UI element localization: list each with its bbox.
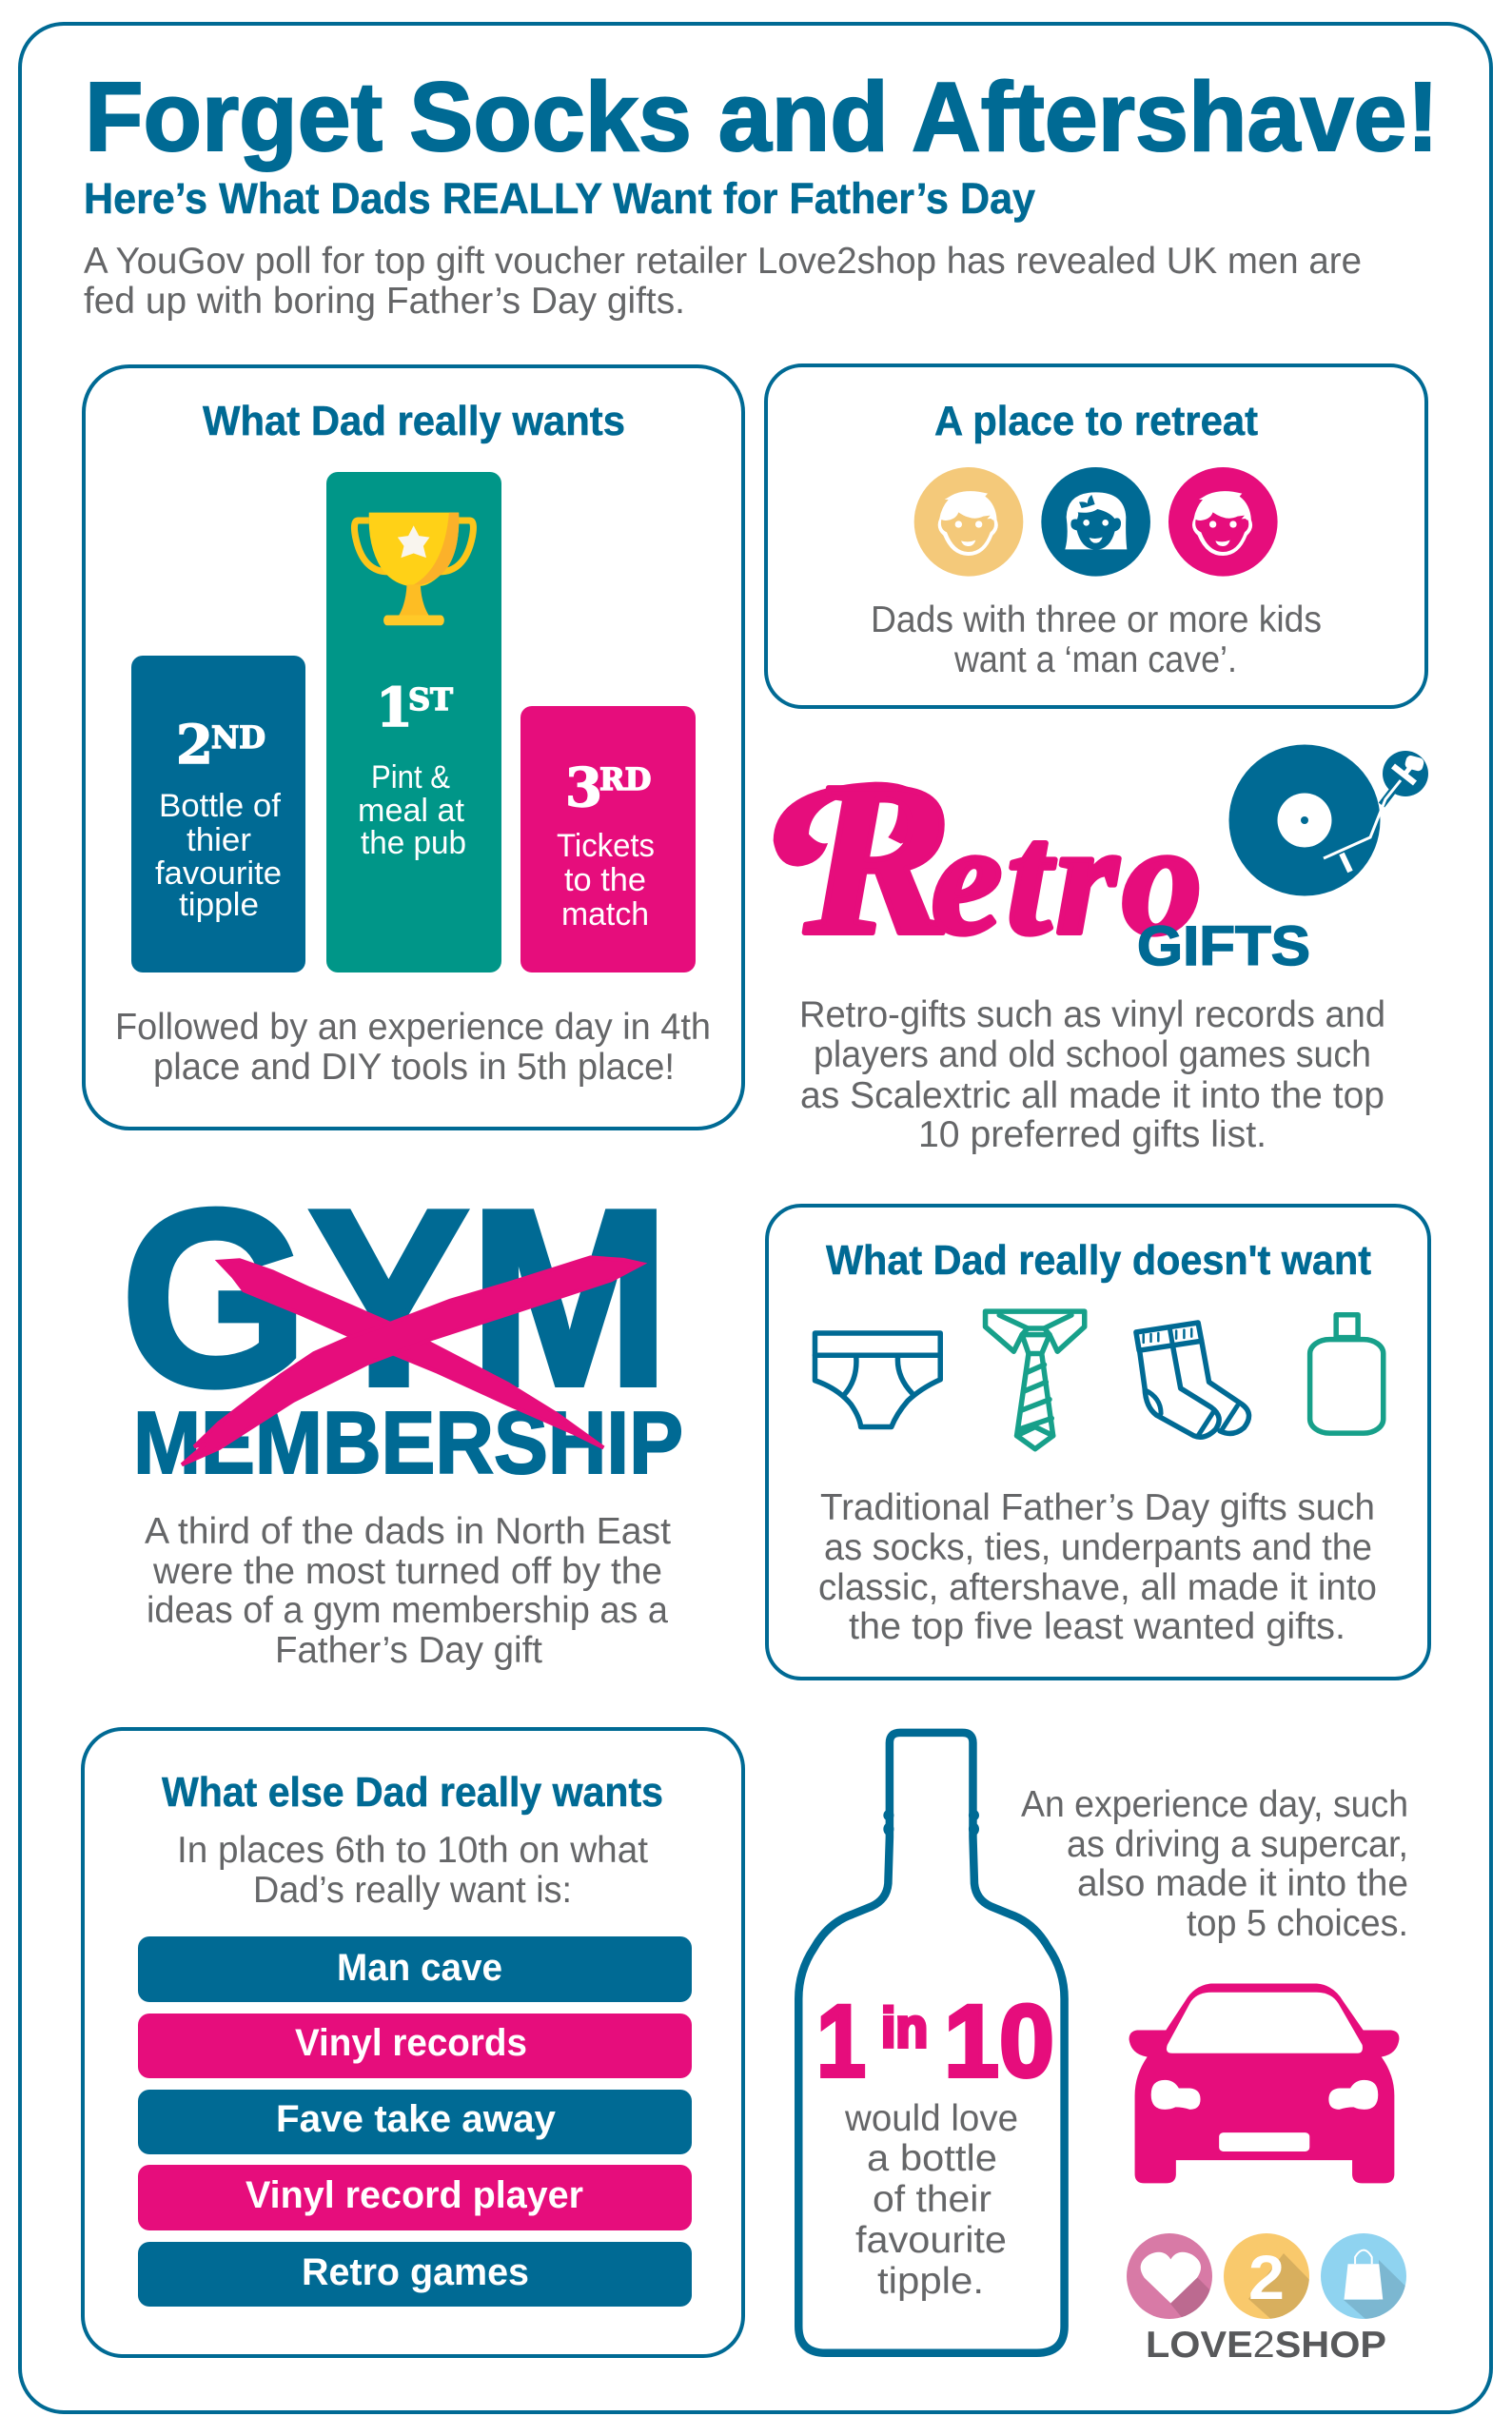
icon: number 2 circle bbox=[1224, 2233, 1309, 2319]
list: man cave: Man cave bbox=[337, 1947, 502, 1989]
icon: socks bbox=[1136, 1323, 1249, 1437]
experience day text: An experience day, such bbox=[1021, 1784, 1408, 1825]
podium: first place bbox=[326, 472, 501, 972]
list: fave take away bbox=[138, 2090, 692, 2154]
footnote: Followed by an experience day in 4th bbox=[115, 1007, 711, 1048]
podium: third place: match bbox=[561, 896, 649, 933]
retro gifts text: as Scalextric all made it into the top bbox=[800, 1075, 1384, 1116]
gym text: Father’s Day gift bbox=[275, 1630, 542, 1671]
experience day text: top 5 choices. bbox=[1187, 1903, 1408, 1944]
bottle text bbox=[844, 2098, 1018, 2302]
membership wordmark: MEMBERSHIP bbox=[133, 1393, 683, 1492]
podium: second place: favourite bbox=[155, 855, 282, 892]
intro text: A YouGov poll for top gift voucher retailer Love2shop has revealed UK men are bbox=[84, 241, 1362, 282]
icon: underpants bbox=[815, 1333, 940, 1426]
icon: car bbox=[1129, 1984, 1399, 2183]
caption: Dads with three or more kids bbox=[871, 599, 1322, 640]
podium: second place: 2 bbox=[176, 714, 213, 776]
retro gifts text bbox=[799, 994, 1385, 1155]
bottle text: favourite bbox=[855, 2220, 1007, 2261]
pink cross bbox=[182, 1257, 642, 1464]
podium: first place: the pub bbox=[361, 825, 466, 861]
body text: the top five least wanted gifts. bbox=[849, 1606, 1345, 1647]
retro gifts text: Retro-gifts such as vinyl records and bbox=[799, 994, 1385, 1035]
icons: three children bbox=[914, 467, 1278, 577]
footnote bbox=[115, 1007, 711, 1088]
body text: as socks, ties, underpants and the bbox=[824, 1527, 1372, 1568]
footnote: place and DIY tools in 5th place! bbox=[153, 1047, 675, 1088]
podium: third place: 3 bbox=[565, 756, 602, 819]
heading: What Dad really doesn't want bbox=[826, 1237, 1371, 1284]
logo wordmark: LOVE2SHOP bbox=[1146, 2325, 1386, 2366]
statistic: 1 in 10: 1 bbox=[816, 1983, 866, 2098]
caption bbox=[871, 599, 1322, 680]
intro text bbox=[84, 241, 1362, 322]
intro text: fed up with boring Father’s Day gifts. bbox=[84, 281, 685, 322]
bottle outline bbox=[798, 1733, 1065, 2353]
intro bbox=[177, 1830, 648, 1911]
gym text bbox=[145, 1511, 671, 1671]
experience day text: also made it into the bbox=[1077, 1863, 1408, 1904]
podium: first place: 1 bbox=[376, 677, 413, 739]
podium: first place: meal at bbox=[358, 793, 465, 829]
podium: second place: ND bbox=[211, 719, 265, 756]
bottle text: would love bbox=[844, 2098, 1018, 2139]
statistic: 1 in 10 bbox=[816, 1983, 1054, 2098]
icon: boy on yellow bbox=[914, 467, 1023, 577]
experience day text: as driving a supercar, bbox=[1067, 1824, 1408, 1865]
retro gifts logo bbox=[774, 737, 1428, 981]
heading: A place to retreat bbox=[934, 398, 1258, 444]
gym text: ideas of a gym membership as a bbox=[147, 1590, 668, 1631]
retro wordmark: etro bbox=[932, 792, 1207, 968]
body text: classic, aftershave, all made it into bbox=[818, 1567, 1377, 1608]
panel: what dad really wants bbox=[84, 366, 743, 1129]
icon: vinyl record player bbox=[1229, 744, 1428, 896]
icon: number 2 circle: 2 bbox=[1248, 2242, 1285, 2312]
list: man cave bbox=[138, 1936, 692, 2002]
list: retro games bbox=[138, 2242, 692, 2307]
gifts wordmark: GIFTS bbox=[1137, 915, 1310, 977]
experience day text bbox=[1021, 1784, 1408, 1944]
retro gifts text: 10 preferred gifts list. bbox=[918, 1114, 1267, 1155]
heading: What Dad really wants bbox=[203, 398, 625, 444]
intro: Dad’s really want is: bbox=[253, 1870, 572, 1911]
podium: second place: tipple bbox=[179, 887, 259, 923]
retro flourish bbox=[774, 782, 930, 867]
love2shop logo bbox=[1127, 2233, 1406, 2358]
list: retro games: Retro games bbox=[302, 2251, 529, 2293]
body text bbox=[818, 1487, 1377, 1647]
podium: second place bbox=[131, 656, 305, 972]
retro gifts text: players and old school games such bbox=[814, 1034, 1371, 1075]
gym wordmark: GYM bbox=[121, 1157, 670, 1438]
statistic: 1 in 10: in bbox=[881, 1997, 928, 2059]
list: vinyl records bbox=[138, 2014, 692, 2078]
list: vinyl record player: Vinyl record player bbox=[245, 2174, 583, 2216]
list: vinyl record player bbox=[138, 2165, 692, 2230]
panel: what else dad really wants bbox=[83, 1729, 743, 2356]
retro wordmark: R bbox=[804, 737, 952, 981]
gym membership crossed out bbox=[121, 1157, 683, 1492]
bottle text: of their bbox=[873, 2179, 992, 2220]
panel: a place to retreat bbox=[766, 365, 1426, 707]
list: fave take away: Fave take away bbox=[276, 2098, 557, 2140]
podium: second place: thier bbox=[187, 822, 251, 858]
bottle callout bbox=[798, 1733, 1065, 2353]
intro: In places 6th to 10th on what bbox=[177, 1830, 648, 1871]
panel: what dad really doesn't want bbox=[767, 1206, 1429, 1679]
podium: third place: RD bbox=[599, 761, 651, 797]
subtitle: Here’s What Dads REALLY Want for Father’s Day bbox=[84, 174, 1035, 223]
gym text: were the most turned off by the bbox=[152, 1551, 662, 1592]
icon: tie bbox=[986, 1311, 1085, 1449]
bottle text: a bottle bbox=[867, 2138, 997, 2179]
statistic: 1 in 10: 10 bbox=[944, 1983, 1054, 2098]
podium: first place: ST bbox=[408, 681, 453, 717]
icon: heart circle bbox=[1127, 2233, 1212, 2319]
icon: trophy bbox=[354, 513, 473, 625]
podium: third place: Tickets bbox=[557, 828, 655, 864]
podium: second place: Bottle of bbox=[159, 788, 282, 824]
icon: shopping bag circle bbox=[1321, 2233, 1406, 2319]
heading: What else Dad really wants bbox=[162, 1769, 663, 1816]
list: vinyl records: Vinyl records bbox=[295, 2022, 527, 2064]
podium: third place bbox=[520, 706, 696, 972]
icon: boy on pink bbox=[1168, 467, 1278, 577]
title: Forget Socks and Aftershave! bbox=[85, 62, 1439, 171]
podium: first place: Pint & bbox=[371, 759, 450, 796]
body text: Traditional Father’s Day gifts such bbox=[820, 1487, 1375, 1528]
icon: aftershave bottle bbox=[1310, 1315, 1384, 1433]
caption: want a ‘man cave’. bbox=[953, 639, 1237, 680]
podium: third place: to the bbox=[564, 862, 646, 898]
gym text: A third of the dads in North East bbox=[145, 1511, 671, 1552]
icon: girl on blue bbox=[1041, 467, 1150, 577]
bottle text: tipple. bbox=[877, 2261, 984, 2302]
